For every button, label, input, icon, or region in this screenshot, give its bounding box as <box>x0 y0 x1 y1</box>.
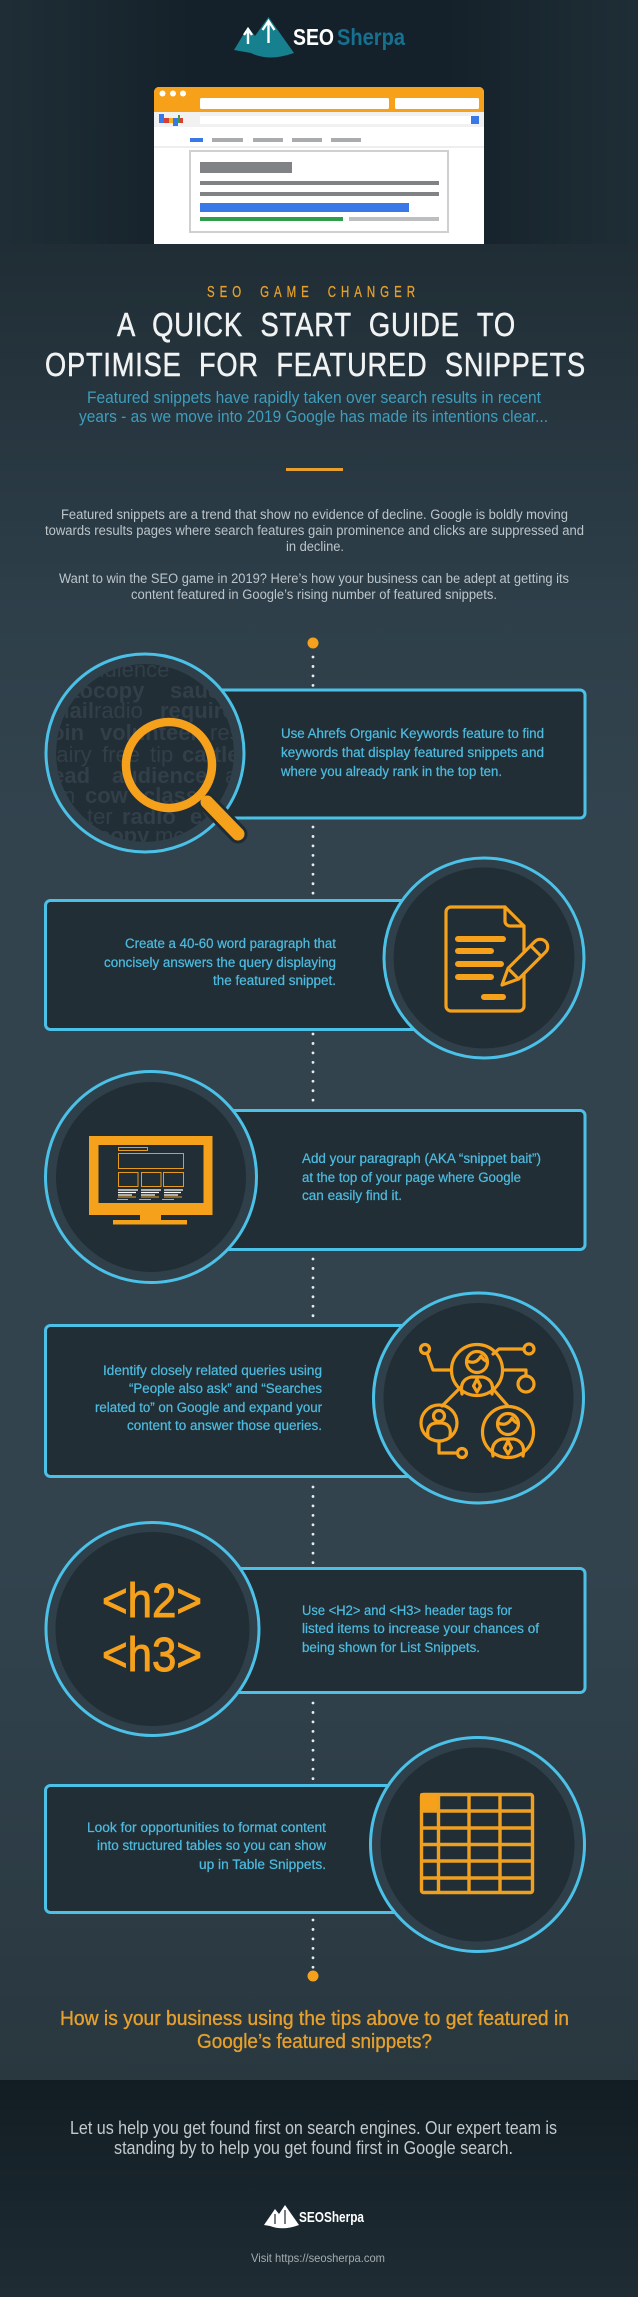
closing question <box>60 2008 569 2053</box>
copy <box>104 936 336 988</box>
step 5 panel <box>46 1522 585 1736</box>
copy: listed items to increase your chances of <box>302 1621 539 1636</box>
copy: related to” on Google and expand your <box>95 1400 322 1415</box>
word cloud: radio <box>122 804 176 829</box>
copy: at the top of your page where Google <box>302 1170 521 1185</box>
icon: monitor <box>89 1136 212 1224</box>
copy: where you already rank in the top ten. <box>280 764 502 779</box>
copy: “People also ask” and “Searches <box>129 1381 322 1396</box>
word cloud: require <box>160 698 235 723</box>
footer logo <box>264 2205 365 2228</box>
copy: Identify closely related queries using <box>103 1363 322 1378</box>
icon: table <box>420 1793 532 1892</box>
copy <box>87 1820 326 1872</box>
copy <box>302 1603 539 1655</box>
subtitle: years - as we move into 2019 Google has made its intentions clear... <box>79 407 548 426</box>
header band <box>0 0 638 244</box>
title <box>45 306 586 383</box>
word cloud: radio <box>94 698 143 723</box>
icon: h2 h3 tags: <h2> <box>102 1575 202 1628</box>
footer band <box>0 2080 638 2297</box>
icon: magnifying glass <box>126 722 238 834</box>
word cloud: a <box>225 763 238 788</box>
copy: Add your paragraph (AKA “snippet bait”) <box>302 1151 541 1166</box>
intro text: in decline. <box>286 539 344 554</box>
word cloud: res <box>210 720 241 745</box>
word cloud: class <box>143 783 198 808</box>
copy: the featured snippet. <box>213 973 336 988</box>
footer text <box>70 2118 557 2158</box>
page background <box>0 244 638 2080</box>
closing question: How is your business using the tips above to get featured in <box>60 2008 569 2030</box>
footer url: Visit https://seosherpa.com <box>251 2251 385 2265</box>
copy: into structured tables so you can show <box>97 1838 326 1853</box>
intro text: towards results pages where search features gain prominence and clicks are suppressed and <box>45 523 584 538</box>
copy: Look for opportunities to format content <box>87 1820 326 1835</box>
text box <box>150 690 585 818</box>
copy: content to answer those queries. <box>127 1418 322 1433</box>
copy: Use <H2> and <H3> header tags for <box>302 1603 512 1618</box>
intro text <box>45 507 584 602</box>
word cloud: dairy <box>44 742 92 767</box>
circle <box>374 1293 584 1503</box>
word cloud: volunteer <box>100 720 199 745</box>
word cloud: join <box>44 720 84 745</box>
copy <box>302 1151 541 1203</box>
title: A QUICK START GUIDE TO <box>117 306 516 343</box>
word cloud: photocopy <box>32 678 144 703</box>
copy <box>280 726 544 779</box>
copy: concisely answers the query displaying <box>104 955 336 970</box>
word cloud: mail <box>50 698 94 723</box>
intro text: Featured snippets are a trend that show no evidence of decline. Google is boldly moving <box>61 507 568 522</box>
word cloud: lead <box>46 763 90 788</box>
icon: h2 h3 tags: <h3> <box>102 1629 202 1682</box>
icon: h2 h3 tags <box>102 1575 202 1682</box>
word cloud: audience <box>112 763 207 788</box>
text box <box>46 1786 486 1912</box>
word cloud: mea <box>155 823 199 848</box>
copy <box>95 1363 322 1433</box>
step 6 panel <box>46 1738 584 1952</box>
orange divider <box>286 468 343 471</box>
word cloud: audience <box>80 657 169 682</box>
browser illustration <box>154 87 484 244</box>
subtitle <box>79 388 548 426</box>
copy: up in Table Snippets. <box>199 1857 326 1872</box>
intro text: Want to win the SEO game in 2019? Here’s how your business can be adept at getting its <box>59 571 569 586</box>
step 1 panel <box>32 654 585 852</box>
step 3 panel <box>46 1072 585 1282</box>
text box <box>150 1568 585 1692</box>
word cloud: sauce <box>170 678 232 703</box>
kicker: SEO Game Changer: SEO GAME CHANGER <box>207 284 420 301</box>
text box <box>46 900 486 1030</box>
word cloud: free <box>102 742 140 767</box>
word cloud: n <box>63 783 75 808</box>
word cloud: ex <box>190 804 215 829</box>
copy: being shown for List Snippets. <box>302 1640 480 1655</box>
footer text: standing by to help you get found first in Google search. <box>114 2138 513 2158</box>
word cloud: cattle <box>182 742 239 767</box>
word cloud: tip <box>150 742 173 767</box>
icon: people network <box>420 1344 534 1458</box>
intro text: content featured in Google’s rising number of featured snippets. <box>131 587 497 602</box>
text box <box>46 1326 486 1476</box>
copy: Create a 40-60 word paragraph that <box>125 936 336 951</box>
logo: SEO Sherpa: SEO <box>293 24 334 50</box>
copy: Use Ahrefs Organic Keywords feature to find <box>281 726 544 741</box>
word cloud: copy <box>98 823 150 848</box>
word cloud <box>56 664 234 842</box>
closing question: Google’s featured snippets? <box>197 2031 432 2053</box>
circle <box>46 1522 259 1736</box>
circle <box>384 858 584 1058</box>
text box <box>150 1110 585 1250</box>
icon: document and pencil <box>446 907 551 1011</box>
circle <box>46 1072 256 1282</box>
logo: SEO Sherpa: Sherpa <box>337 24 405 50</box>
word cloud: cow <box>85 783 129 808</box>
word cloud: ter <box>87 804 113 829</box>
footer logo: SEOSherpa <box>299 2209 365 2226</box>
circle <box>46 654 244 852</box>
timeline dots <box>308 638 318 1982</box>
step 2 panel <box>46 858 584 1058</box>
footer text: Let us help you get found first on search engines. Our expert team is <box>70 2118 557 2138</box>
circle <box>370 1738 584 1952</box>
copy: can easily find it. <box>302 1188 402 1203</box>
subtitle: Featured snippets have rapidly taken over search results in recent <box>87 388 541 407</box>
step 4 panel <box>46 1293 584 1503</box>
logo: SEO Sherpa <box>234 17 405 58</box>
copy: keywords that display featured snippets and <box>281 745 544 760</box>
